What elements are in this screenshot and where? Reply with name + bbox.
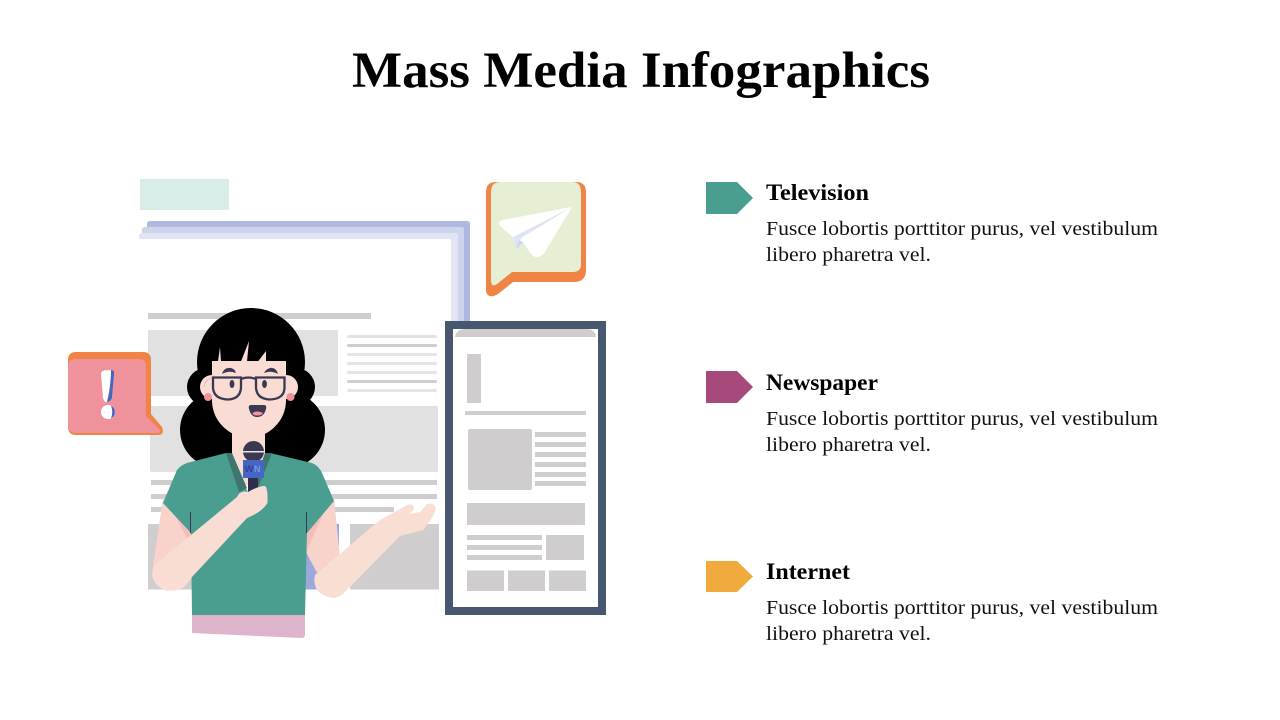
ears and earrings [200,375,298,401]
stacked web pages [138,221,470,330]
microphone: W [244,464,254,474]
skirt band [192,615,305,638]
mouth [249,405,266,417]
icon: paper plane [499,207,572,257]
item: Internet [706,559,1158,645]
glasses [213,378,284,400]
icon: teal tag arrow [706,182,753,214]
body text: Internet: libero pharetra vel. [766,623,931,645]
icon: exclamation mark [101,370,115,419]
reporter figure [152,308,436,638]
neck [232,425,265,485]
face [212,361,286,438]
item: Newspaper [706,370,1158,456]
body text: Television: libero pharetra vel. [766,244,931,266]
teal note rectangle [140,179,229,210]
speech bubble with exclamation mark [68,352,163,435]
microphone [243,441,264,495]
heading: Television: Television [766,180,869,205]
heading: Internet: Internet [766,559,850,584]
body text: Newspaper: Fusce lobortis porttitor purus, vel vestibulum [766,408,1158,430]
eyes and brows [222,368,278,388]
shirt collar [226,453,272,492]
left upper arm [152,498,193,580]
green shirt [163,453,334,615]
speech bubble with paper plane [486,182,586,296]
newspaper [445,321,606,615]
right upper arm [305,498,340,573]
body text: Television: Fusce lobortis porttitor purus, vel vestibulum [766,218,1158,240]
heading: Newspaper: Newspaper [766,370,878,395]
title: Mass Media Infographics [352,43,930,99]
fringe notches [218,341,266,362]
hair [180,308,325,468]
body text: Internet: Fusce lobortis porttitor purus, vel vestibulum [766,597,1158,619]
left forearm and hand holding mic [152,486,268,591]
right forearm and open hand [314,504,436,598]
illustration: news reporter with media [68,179,606,638]
microphone: N [254,464,260,474]
web page content [148,313,439,590]
body text: Newspaper: libero pharetra vel. [766,434,931,456]
icon: purple tag arrow [706,371,753,403]
sleeve seams [190,512,306,533]
item: Television [706,180,1158,266]
icon: orange tag arrow [706,561,753,592]
